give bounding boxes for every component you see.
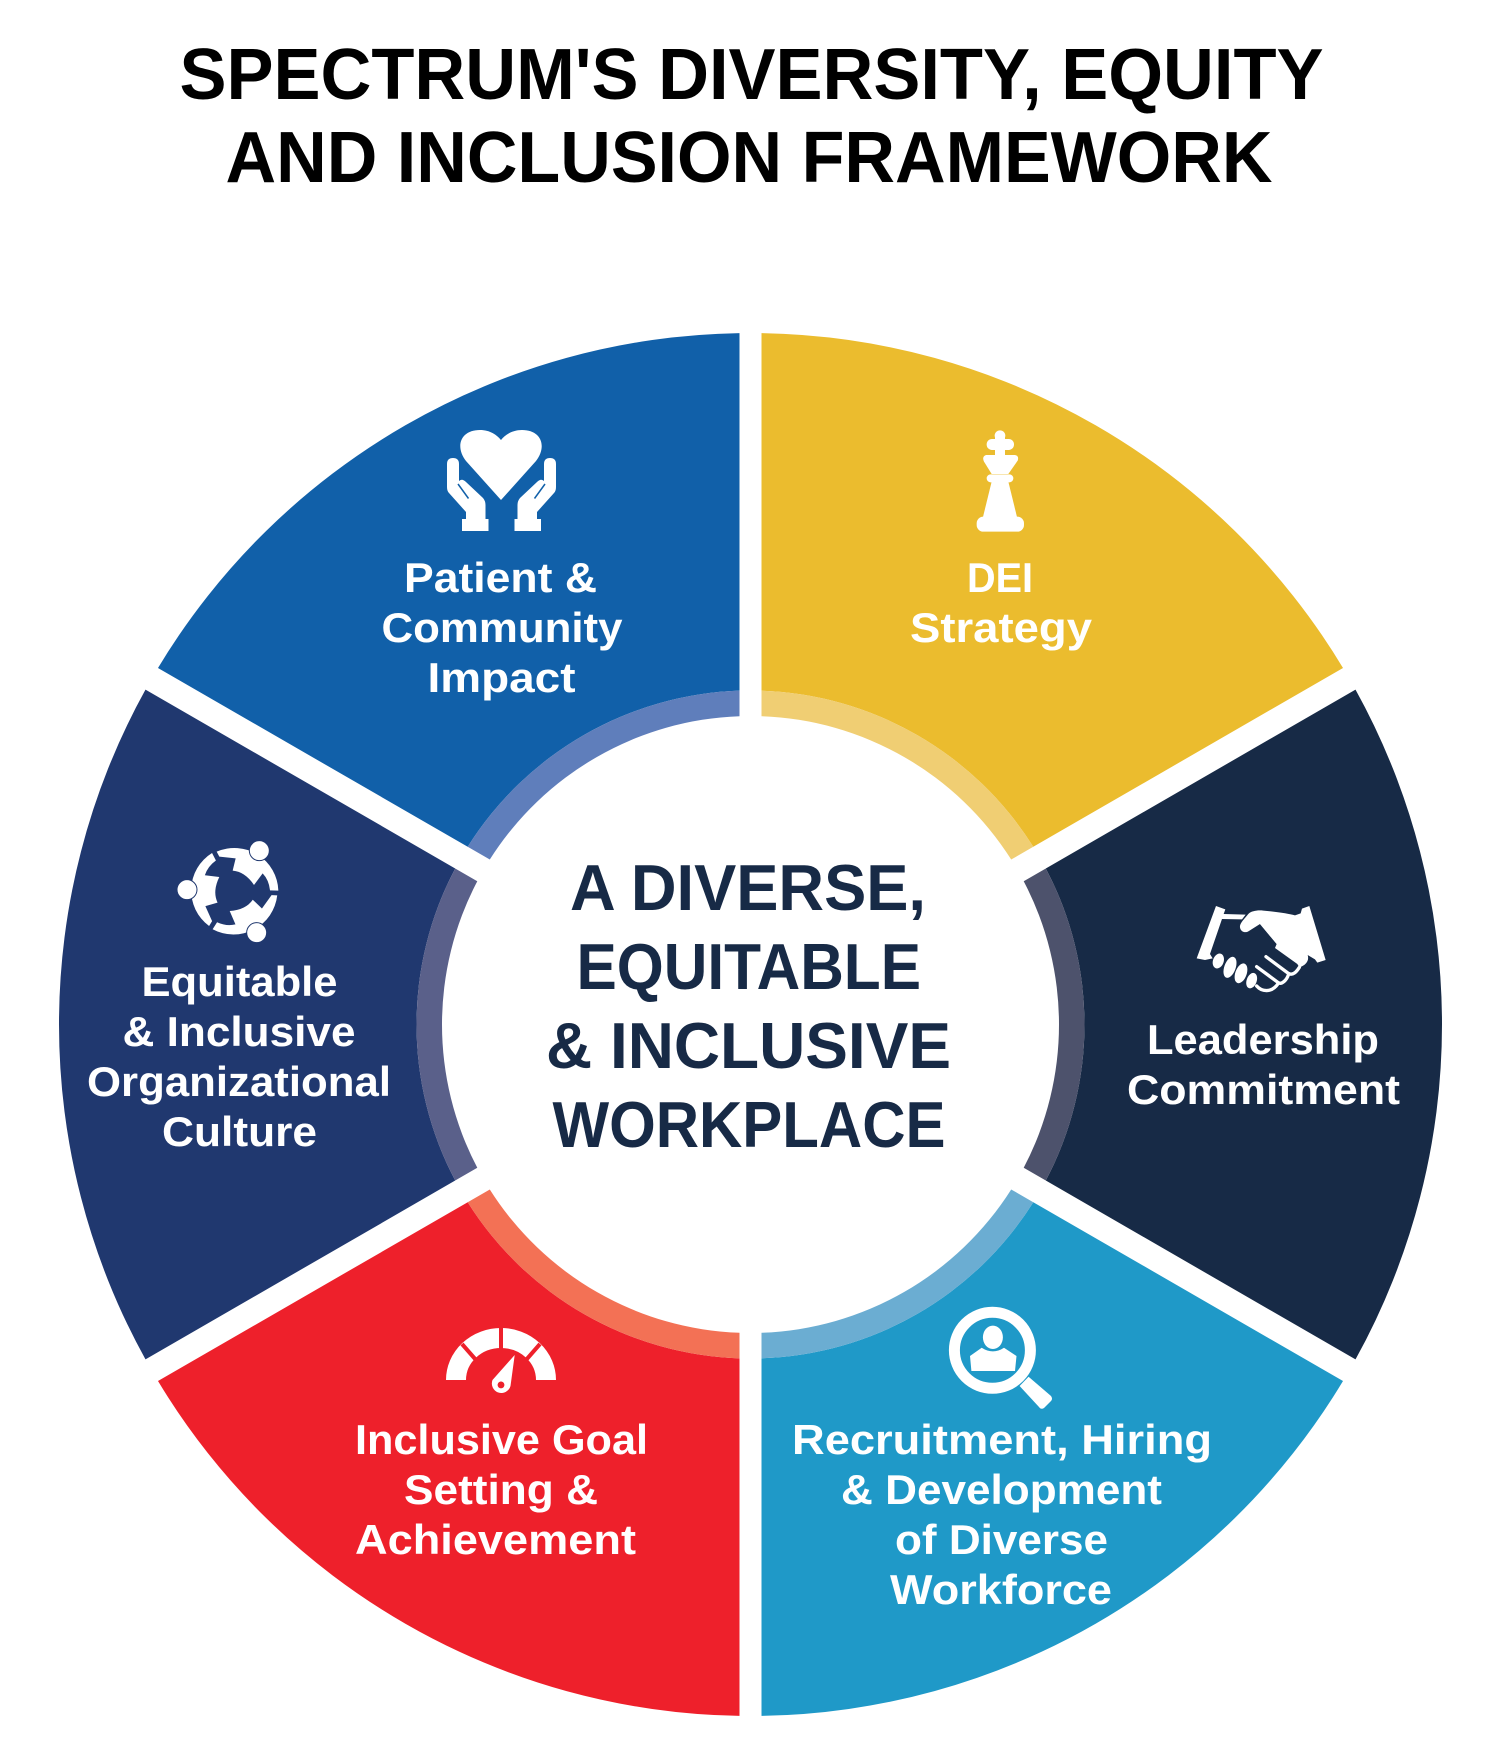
title: AND INCLUSION FRAMEWORK (226, 118, 1273, 198)
label: equitable and inclusive culture: Organizational (87, 1058, 391, 1105)
icon: hands holding heart (447, 430, 556, 531)
center text: a diverse, equitable and inclusive workplace (546, 851, 951, 1161)
label: recruitment hiring and development (792, 1416, 1212, 1613)
panel: equitable and inclusive culture (59, 690, 477, 1359)
icon: magnifier with person (954, 1312, 1052, 1409)
label: inclusive goal setting: Setting & (404, 1466, 598, 1513)
panel: leadership commitment (1024, 690, 1442, 1359)
panel: recruitment hiring and development (762, 1189, 1343, 1716)
icon: handshake (1197, 906, 1326, 991)
label: leadership commitment: Leadership (1147, 1016, 1379, 1063)
label: patient and community impact (382, 554, 623, 701)
center text: a diverse, equitable and inclusive workplace: & INCLUSIVE (546, 1009, 951, 1082)
icon: gauge (456, 1320, 546, 1393)
label: leadership commitment (1127, 1016, 1400, 1113)
center text: a diverse, equitable and inclusive workplace: EQUITABLE (576, 930, 921, 1003)
center text: a diverse, equitable and inclusive workplace: WORKPLACE (552, 1088, 946, 1161)
title (180, 35, 1324, 198)
label: DEI strategy: Strategy (910, 604, 1093, 651)
panel: DEI strategy (762, 333, 1343, 860)
label: DEI strategy: DEI (967, 554, 1033, 601)
label: DEI strategy (910, 554, 1093, 651)
label: patient and community impact: Impact (428, 654, 576, 701)
label: recruitment hiring and development: Workforce (890, 1566, 1112, 1613)
label: patient and community impact: Patient & (404, 554, 597, 601)
label: inclusive goal setting (355, 1416, 648, 1563)
icon: chess king (977, 430, 1024, 532)
label: inclusive goal setting: Inclusive Goal (355, 1416, 648, 1463)
label: equitable and inclusive culture: & Inclusive (122, 1008, 356, 1055)
label: leadership commitment: Commitment (1127, 1066, 1400, 1113)
icon: three people circle (175, 841, 280, 951)
label: equitable and inclusive culture: Equitable (142, 958, 338, 1005)
label: inclusive goal setting: Achievement (355, 1516, 636, 1563)
label: patient and community impact: Community (382, 604, 623, 651)
panel: patient and community impact (158, 333, 740, 860)
title: SPECTRUM'S DIVERSITY, EQUITY (180, 35, 1324, 115)
label: recruitment hiring and development: Recruitment, Hiring (792, 1416, 1212, 1463)
panel: inclusive goal setting (158, 1189, 740, 1716)
label: equitable and inclusive culture: Culture (162, 1108, 317, 1155)
center text: a diverse, equitable and inclusive workplace: A DIVERSE, (570, 851, 926, 924)
label: recruitment hiring and development: of Diverse (895, 1516, 1108, 1563)
label: equitable and inclusive culture (87, 958, 391, 1155)
label: recruitment hiring and development: & Development (841, 1466, 1162, 1513)
